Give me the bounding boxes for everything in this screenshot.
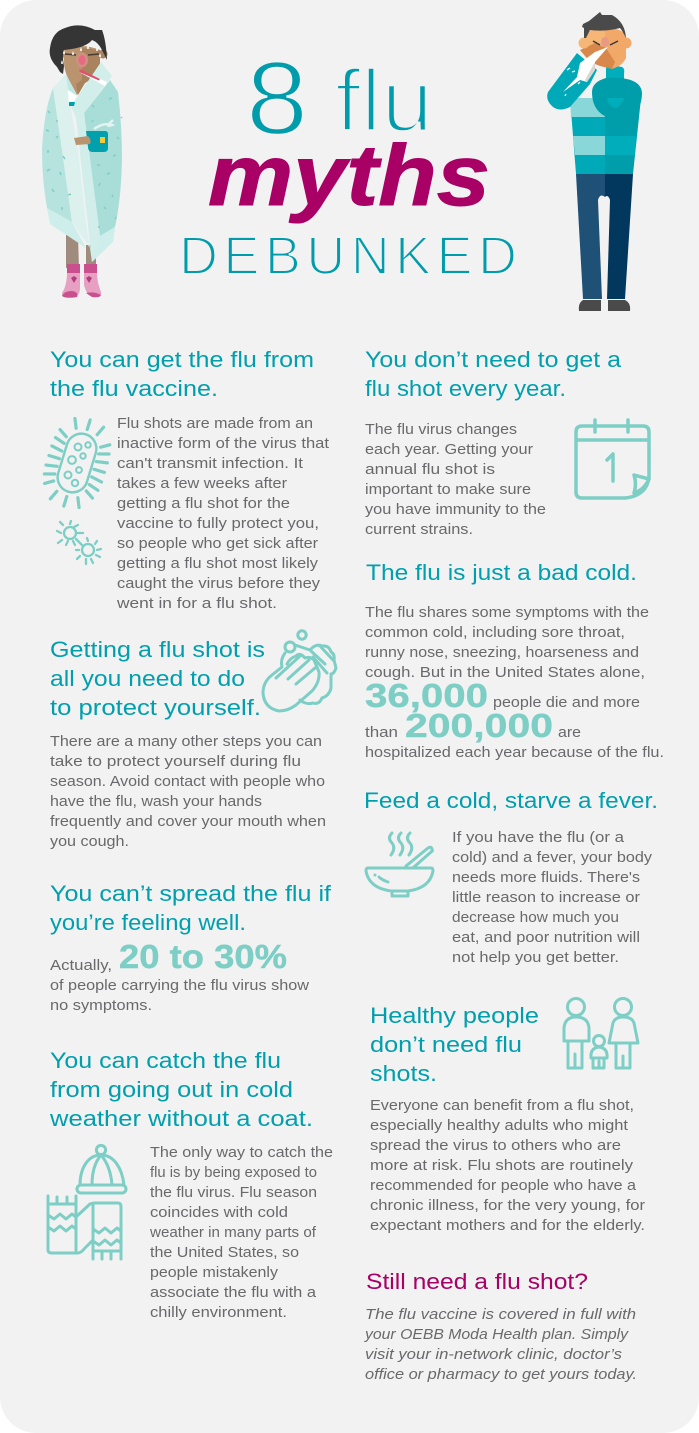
call to action body: visit your in-network clinic, doctor’s [365,1347,622,1363]
myth 5 body: The flu virus changes [365,422,517,438]
myth 1 heading: You can get the flu from [50,347,314,372]
myth 2 body: There are a many other steps you can [50,734,322,750]
myth 7 body: little reason to increase or [452,890,640,906]
myth 6 body with statistics: people die and more [493,695,640,711]
myth 1 body: takes a few weeks after [117,476,287,492]
myth 7 body [452,830,653,966]
myth 4 body: weather in many parts of [149,1225,317,1241]
myth 7 body: cold) and a fever, your body [452,850,653,866]
myth 4 body: The only way to catch the [150,1145,333,1161]
icon: family [564,998,638,1068]
icon: hat and scarf [48,1145,126,1259]
myth 8 body: Everyone can benefit from a flu shot, [370,1098,634,1114]
title: myths [208,128,490,224]
myth 1 body: getting a flu shot for the [117,496,290,512]
myth 4 body: people mistakenly [150,1265,279,1281]
myth 2 body [50,734,326,850]
myth 2 heading: all you need to do [50,666,245,691]
myth 7 heading: Feed a cold, starve a fever. [364,788,658,813]
icon: washing hands [263,631,336,711]
myth 8 body: chronic illness, for the very young, for [370,1198,645,1214]
myth 4 heading: weather without a coat. [49,1106,313,1131]
call to action body: The flu vaccine is covered in full with [365,1307,636,1323]
call to action body: office or pharmacy to get yours today. [365,1367,637,1383]
myth 8 body [370,1098,645,1234]
myth 6 body with statistics: hospitalized each year because of the flu. [365,745,664,761]
myth 6 body with statistics: are [558,725,581,741]
myth 1 body: Flu shots are made from an [117,416,313,432]
myth 1 body: caught the virus before they [117,576,321,592]
myth 3 heading [50,881,332,935]
icon: germs [36,411,118,564]
myth 2 heading: Getting a flu shot is [50,637,265,662]
myth 8 heading: shots. [370,1061,437,1086]
myth 4 body: coincides with cold [150,1205,288,1221]
myth 3 body with statistic: 20 to 30% [119,938,287,975]
myth 5 body: annual flu shot is [365,462,495,478]
myth 4 body: chilly environment. [150,1305,287,1321]
myth 8 body: especially healthy adults who might [370,1118,628,1134]
myth 6 body with statistics: cough. But in the United States alone, [365,665,645,681]
myth 8 body: expectant mothers and for the elderly. [370,1218,645,1234]
myth 6 body with statistics: common cold, including sore throat, [365,625,625,641]
myth 2 heading [50,637,265,720]
myth 5 body [365,422,546,538]
myth 2 body: take to protect yourself during flu [50,754,301,770]
myth 5 body: current strains. [365,522,473,538]
myth 7 body: needs more fluids. There's [452,870,640,886]
myth 6 body with statistics: runny nose, sneezing, hoarseness and [365,645,639,661]
myth 6 body with statistics [365,605,664,761]
myth 4 heading [49,1048,313,1131]
myth 1 body: getting a flu shot most likely [117,556,319,572]
illustration: sick woman in blanket [42,25,122,298]
myth 1 body [116,416,329,612]
myth 6 body with statistics: 36,000 [365,677,488,714]
call to action body [364,1307,637,1383]
call to action heading: Still need a flu shot? [366,1269,588,1294]
myth 6 body with statistics: 200,000 [405,707,553,744]
myth 1 body: went in for a flu shot. [116,596,277,612]
myth 4 body [149,1145,333,1321]
myth 6 body with statistics: than [365,725,398,741]
myth 3 body with statistic: no symptoms. [50,998,152,1014]
myth 5 heading: flu shot every year. [365,376,566,401]
myth 1 body: so people who get sick after [117,536,318,552]
myth 5 body: each year. Getting your [365,442,533,458]
myth 2 heading: to protect yourself. [50,695,261,720]
myth 3 heading: You can’t spread the flu if [50,881,332,906]
icon: calendar [576,420,649,498]
myth 2 body: have the flu, wash your hands [50,794,262,810]
myth 2 body: frequently and cover your mouth when [50,814,326,830]
myth 1 body: vaccine to fully protect you, [117,516,319,532]
myth 5 body: you have immunity to the [365,502,546,518]
myth 4 body: the flu virus. Flu season [150,1185,317,1201]
myth 8 heading: Healthy people [370,1003,539,1028]
myth 2 body: you cough. [50,834,129,850]
myth 7 body: eat, and poor nutrition will [452,930,640,946]
myth 1 body: inactive form of the virus that [117,436,329,452]
myth 1 heading: the flu vaccine. [50,376,218,401]
myth 6 heading: The flu is just a bad cold. [366,560,637,585]
illustration: man blowing nose [547,12,642,311]
myth 3 body with statistic: of people carrying the flu virus show [50,978,310,994]
title [179,41,517,286]
myth 8 body: recommended for people who have a [370,1178,637,1194]
myth 4 body: flu is by being exposed to [150,1165,317,1181]
title: flu [335,51,433,150]
myth 5 heading [365,347,622,401]
myth 1 body: can't transmit infection. It [117,456,303,472]
myth 8 heading [370,1003,539,1086]
myth 8 body: spread the virus to others who are [370,1138,621,1154]
myth 8 body: more at risk. Flu shots are routinely [370,1158,634,1174]
myth 2 body: season. Avoid contact with people who [50,774,325,790]
title: 8 [246,41,308,157]
myth 7 body: decrease how much you [452,910,619,926]
call to action body: your OEBB Moda Health plan. Simply [364,1327,629,1343]
myth 5 heading: You don’t need to get a [365,347,622,372]
myth 4 body: the United States, so [150,1245,299,1261]
myth 8 heading: don’t need flu [370,1032,522,1057]
myth 3 body with statistic [50,938,310,1014]
myth 1 heading [50,347,314,401]
myth 7 body: not help you get better. [452,950,619,966]
myth 5 body: important to make sure [365,482,531,498]
myth 6 body with statistics: The flu shares some symptoms with the [365,605,649,621]
title: DEBUNKED [179,226,517,286]
myth 3 heading: you’re feeling well. [50,910,246,935]
myth 4 heading: You can catch the flu [50,1048,281,1073]
myth 3 body with statistic: Actually, [50,958,112,974]
myth 7 body: If you have the flu (or a [452,830,625,846]
myth 4 body: associate the flu with a [150,1285,317,1301]
icon: soup bowl [366,833,433,896]
myth 4 heading: from going out in cold [50,1077,293,1102]
